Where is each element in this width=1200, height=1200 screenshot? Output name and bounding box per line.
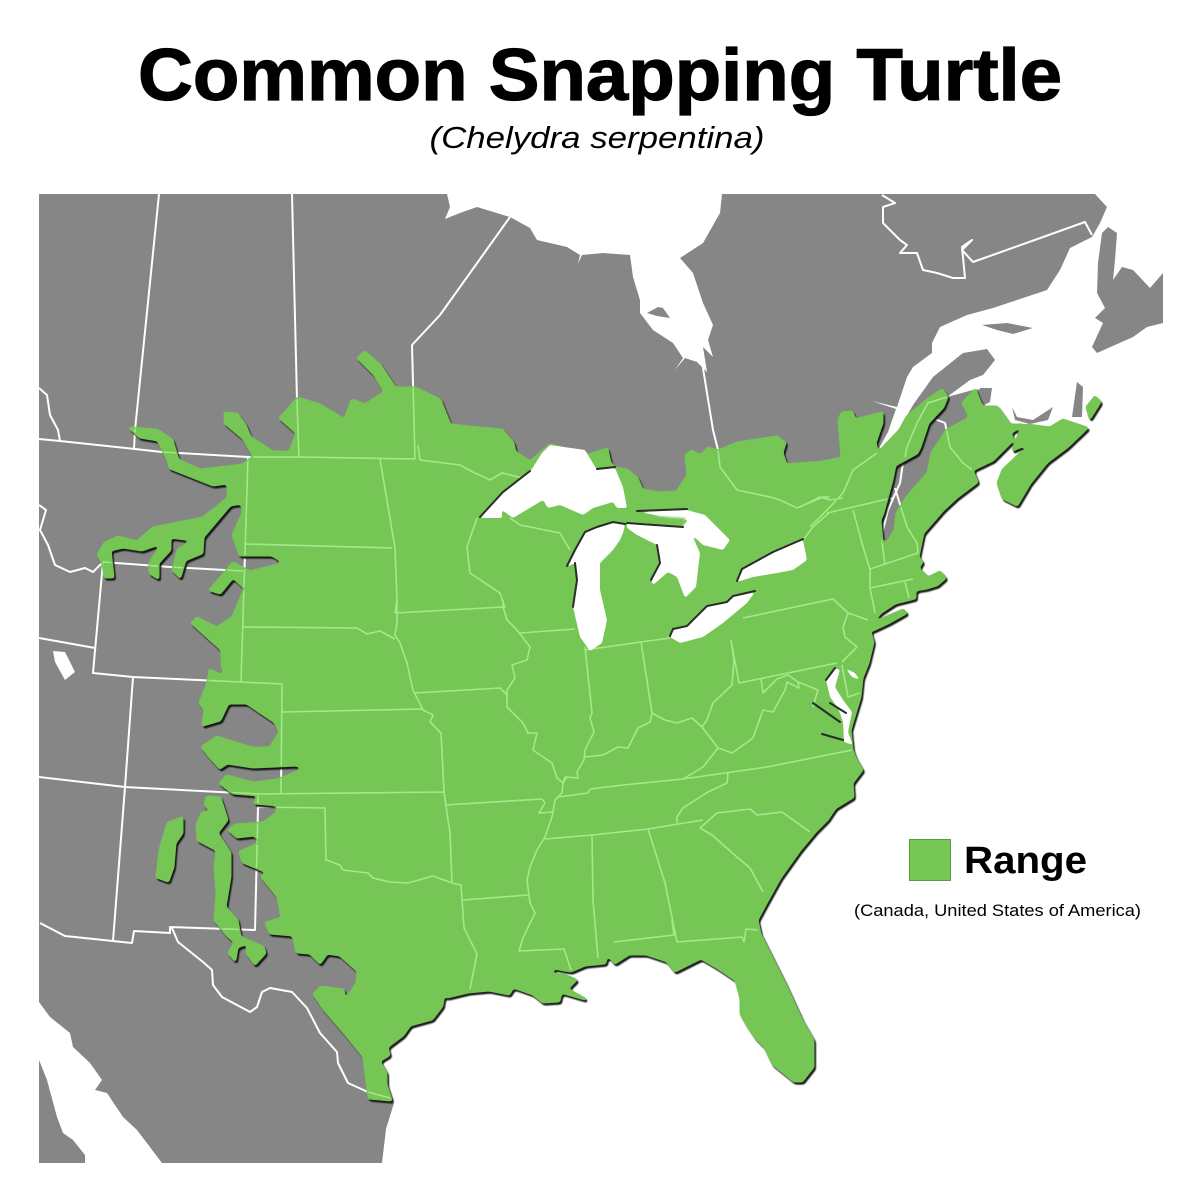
land base: [39, 194, 1163, 1163]
Lake Superior: [480, 445, 627, 518]
water: Gulf of California: [39, 1002, 162, 1163]
land: Cape Breton and PEI: [980, 382, 1083, 424]
light green borders over range: [102, 388, 972, 1099]
land: Anticosti Island: [982, 323, 1033, 334]
Lake Huron: [627, 510, 730, 598]
legend note: (Canada, United States of America): [854, 901, 1141, 920]
Lake Erie: [670, 592, 755, 643]
title: Common Snapping Turtle: [138, 35, 1062, 116]
water: Hudson and James Bay: [445, 194, 722, 372]
Chesapeake Bay: [826, 668, 853, 745]
Manitoulin Island: [642, 516, 685, 525]
Lake Ontario: [737, 540, 807, 582]
green range: [98, 352, 1100, 1100]
Lake Michigan: [567, 523, 625, 651]
water: Atlantic, Gulf of St Lawrence and Gulf of Mexico: [375, 194, 1163, 1163]
lake and estuary shore shadows: [480, 467, 846, 740]
water: Great Salt Lake: [53, 651, 75, 680]
Delaware Bay: [847, 670, 858, 679]
legend swatch: [910, 840, 950, 880]
land: Newfoundland: [1092, 227, 1163, 353]
Great Lakes and bays: [480, 445, 860, 745]
legend: [854, 840, 1141, 920]
map panel: [39, 194, 1163, 1163]
legend label: Range: [964, 840, 1087, 882]
white state and province borders: [39, 194, 1092, 1098]
subtitle: (Chelydra serpentina): [430, 120, 764, 155]
